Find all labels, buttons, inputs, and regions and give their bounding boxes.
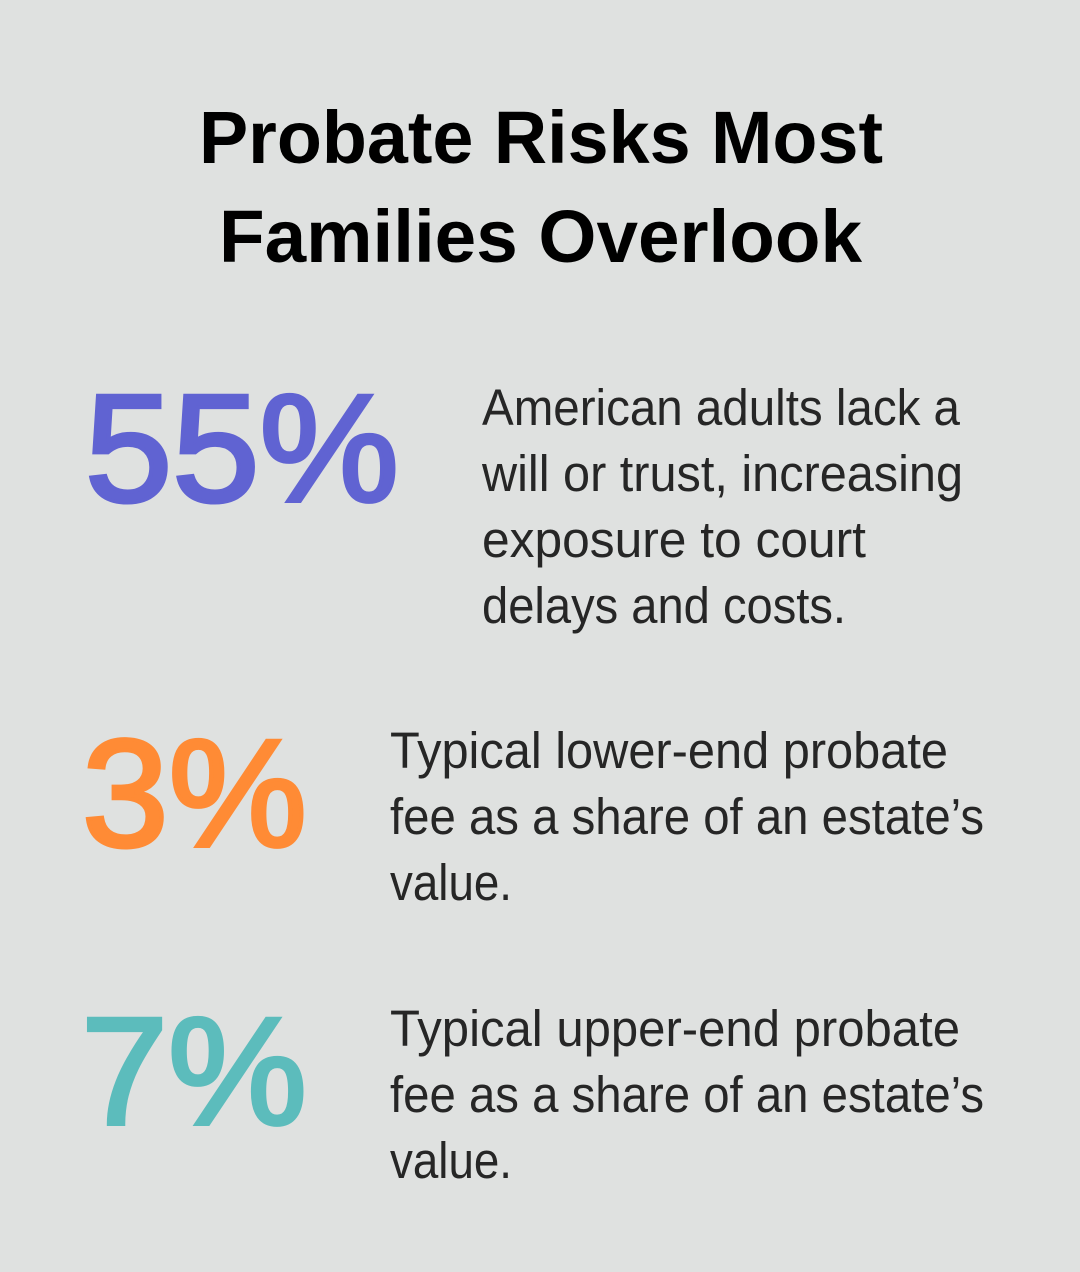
text: 55% description: will or trust, increasing <box>481 445 963 502</box>
text: 3% description: fee as a share of an estate’s <box>390 788 984 845</box>
text: 55% description <box>481 379 963 634</box>
panel: 55% stat <box>85 363 963 634</box>
panel: 3% stat <box>82 708 984 911</box>
panel: 7% stat <box>81 986 984 1189</box>
text: 3% description: value. <box>390 854 512 911</box>
title: Probate Risks Most <box>199 96 883 179</box>
text: 7% description: fee as a share of an estate’s <box>390 1066 984 1123</box>
text: 55% description: delays and costs. <box>482 577 846 634</box>
number: 7%: 7% <box>81 986 307 1157</box>
text: 7% description <box>390 1000 984 1189</box>
text: 55% description: exposure to court <box>482 511 866 568</box>
text: 7% description: Typical upper-end probate <box>390 1000 960 1057</box>
text: 3% description: Typical lower-end probate <box>390 722 948 779</box>
text: 3% description <box>390 722 984 911</box>
number: 55%: 55% <box>85 363 399 534</box>
title <box>199 96 883 278</box>
title: Families Overlook <box>219 195 863 278</box>
text: 7% description: value. <box>390 1132 512 1189</box>
number: 3%: 3% <box>82 708 307 879</box>
text: 55% description: American adults lack a <box>482 379 961 436</box>
